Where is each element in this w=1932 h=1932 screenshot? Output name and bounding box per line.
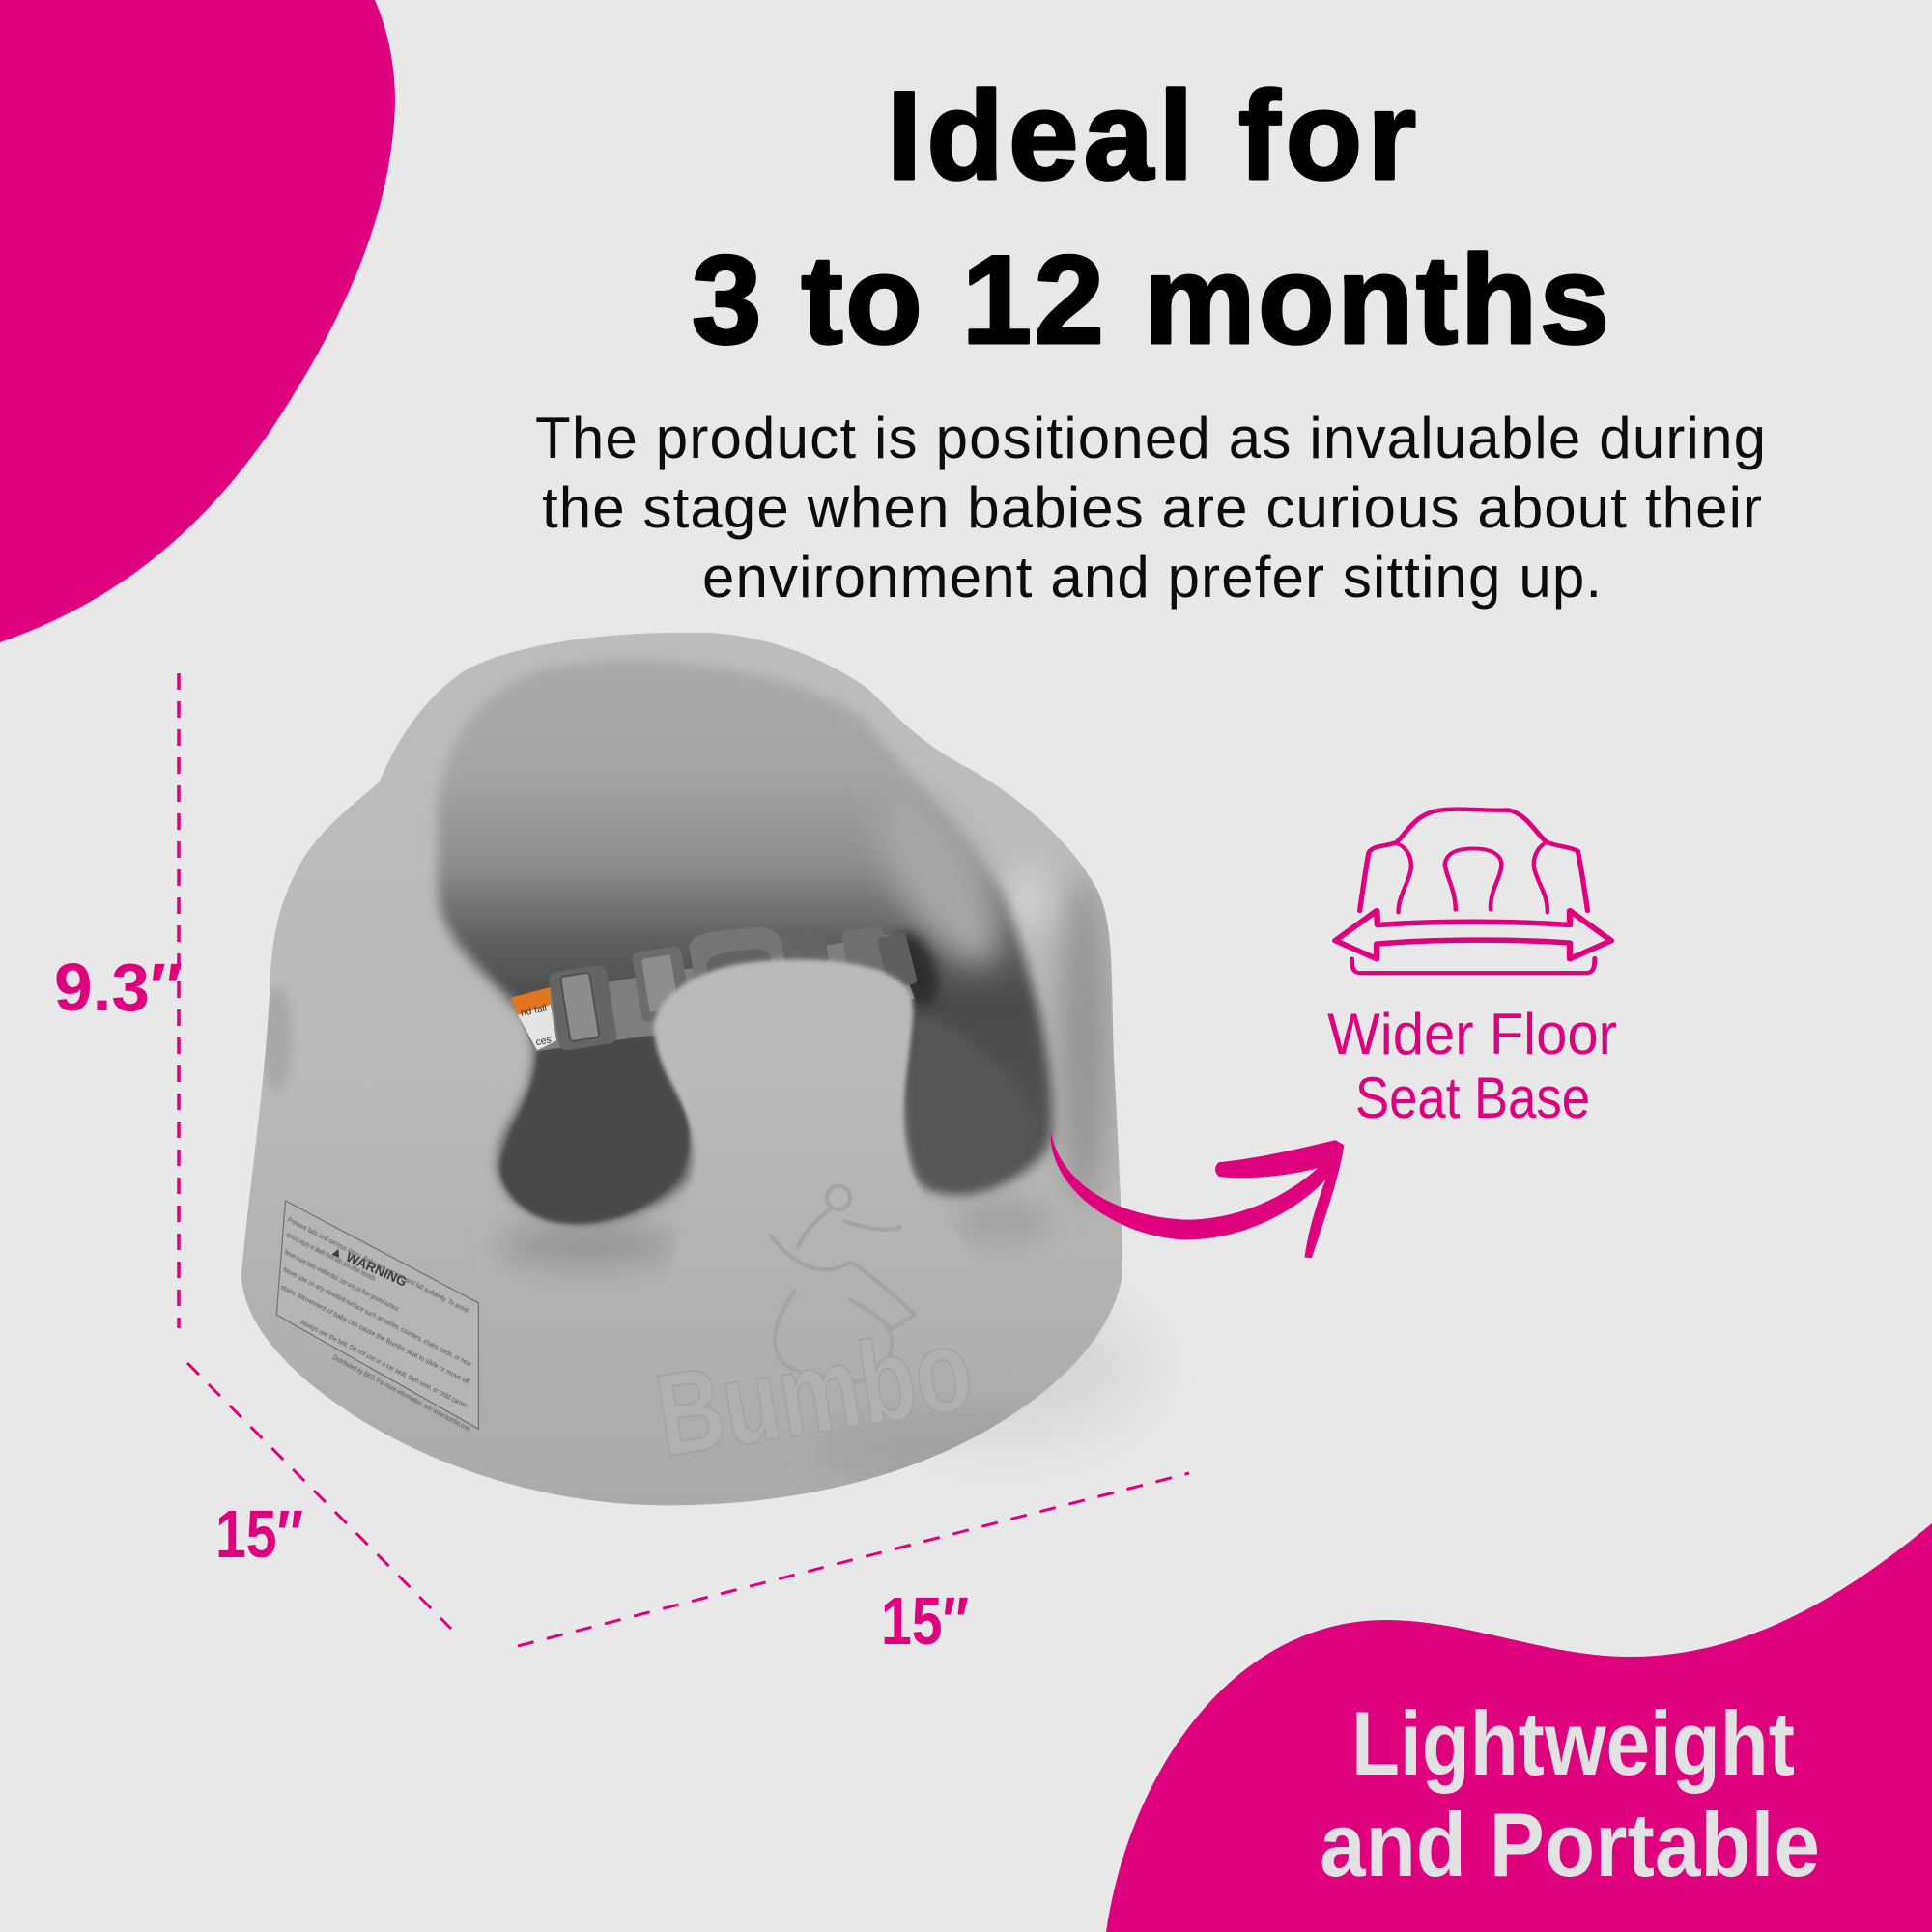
decorative blob: top left (0, 0, 395, 642)
title (692, 65, 1609, 370)
embossed brand name: Bumbo (647, 1302, 980, 1481)
warning label: Always use the belt. Do not use in a car seat, bath seat, or child carrier. (299, 1318, 470, 1410)
warning label: serious injury or death from falls and other hazards (285, 1230, 378, 1283)
icon: double-headed arrow (1335, 911, 1611, 959)
heading: lightweight and portable: and Portable (1320, 1794, 1820, 1895)
seat shadow (862, 1297, 1143, 1437)
callout: wider floor seat base: Wider Floor (1327, 1002, 1617, 1066)
warning label: ▲ WARNING (328, 1242, 410, 1290)
description text (535, 406, 1766, 610)
warning label: Distributed by BKD. For more information, see www.bumbo.com (331, 1352, 472, 1434)
decorative blob: bottom right (1106, 1523, 1932, 1932)
icon: right arm (1534, 842, 1548, 912)
warning label: Never use on any elevated surface such as tables, counters, chairs, beds, or near (282, 1264, 473, 1369)
seat body (242, 633, 1122, 1505)
title: 3 to 12 months (692, 229, 1609, 370)
dimension label: depth 15: 15″ (215, 1496, 303, 1572)
warning label: Prevent falls and serious injury. Baby can escape and fall suddenly. To avoid (286, 1215, 470, 1315)
base shading (837, 1408, 1020, 1481)
callout: wider floor seat base (1327, 1002, 1617, 1130)
safety belt (511, 925, 947, 1051)
title: Ideal for (887, 65, 1416, 206)
dimension line: width (518, 1473, 1189, 1646)
embossed elephant logo (771, 1186, 915, 1382)
dimension label: height 9.3: 9.3″ (54, 950, 183, 1025)
warning label (276, 1201, 478, 1434)
heading: lightweight and portable (1320, 1692, 1820, 1895)
icon: wider floor seat base (1335, 810, 1611, 973)
dimension line: height (177, 673, 181, 1328)
cavity highlight (853, 769, 1023, 982)
description text: environment and prefer sitting up. (702, 545, 1602, 610)
safety belt: nd fall (520, 1004, 548, 1019)
seat shading (262, 865, 1111, 1268)
arrow: seat base to callout (1051, 1131, 1344, 1258)
safety belt: ces (535, 1035, 553, 1048)
product: grey floor seat (242, 633, 1143, 1505)
callout: wider floor seat base: Seat Base (1355, 1065, 1590, 1130)
warning label: Never leave baby unattended. Use only on floor ground surface. (283, 1247, 402, 1314)
icon: left arm (1397, 843, 1411, 912)
heading: lightweight and portable: Lightweight (1351, 1692, 1795, 1794)
seat pommel (651, 959, 978, 1419)
description text: The product is positioned as invaluable during (535, 406, 1766, 470)
dimension line: depth (187, 1363, 451, 1629)
leg hole: left (500, 1034, 689, 1224)
seat cavity (438, 661, 1053, 1221)
dimension label: width 15: 15″ (881, 1583, 969, 1659)
icon: pommel (1445, 848, 1501, 910)
description text: the stage when babies are curious about their (542, 475, 1762, 540)
icon: seat base (1351, 958, 1595, 973)
leg hole: right (905, 1016, 1028, 1194)
warning label: stairs. Movement of baby can cause the Bumbo seat to slide or move off (279, 1283, 471, 1386)
icon: seat back outline (1360, 810, 1587, 911)
